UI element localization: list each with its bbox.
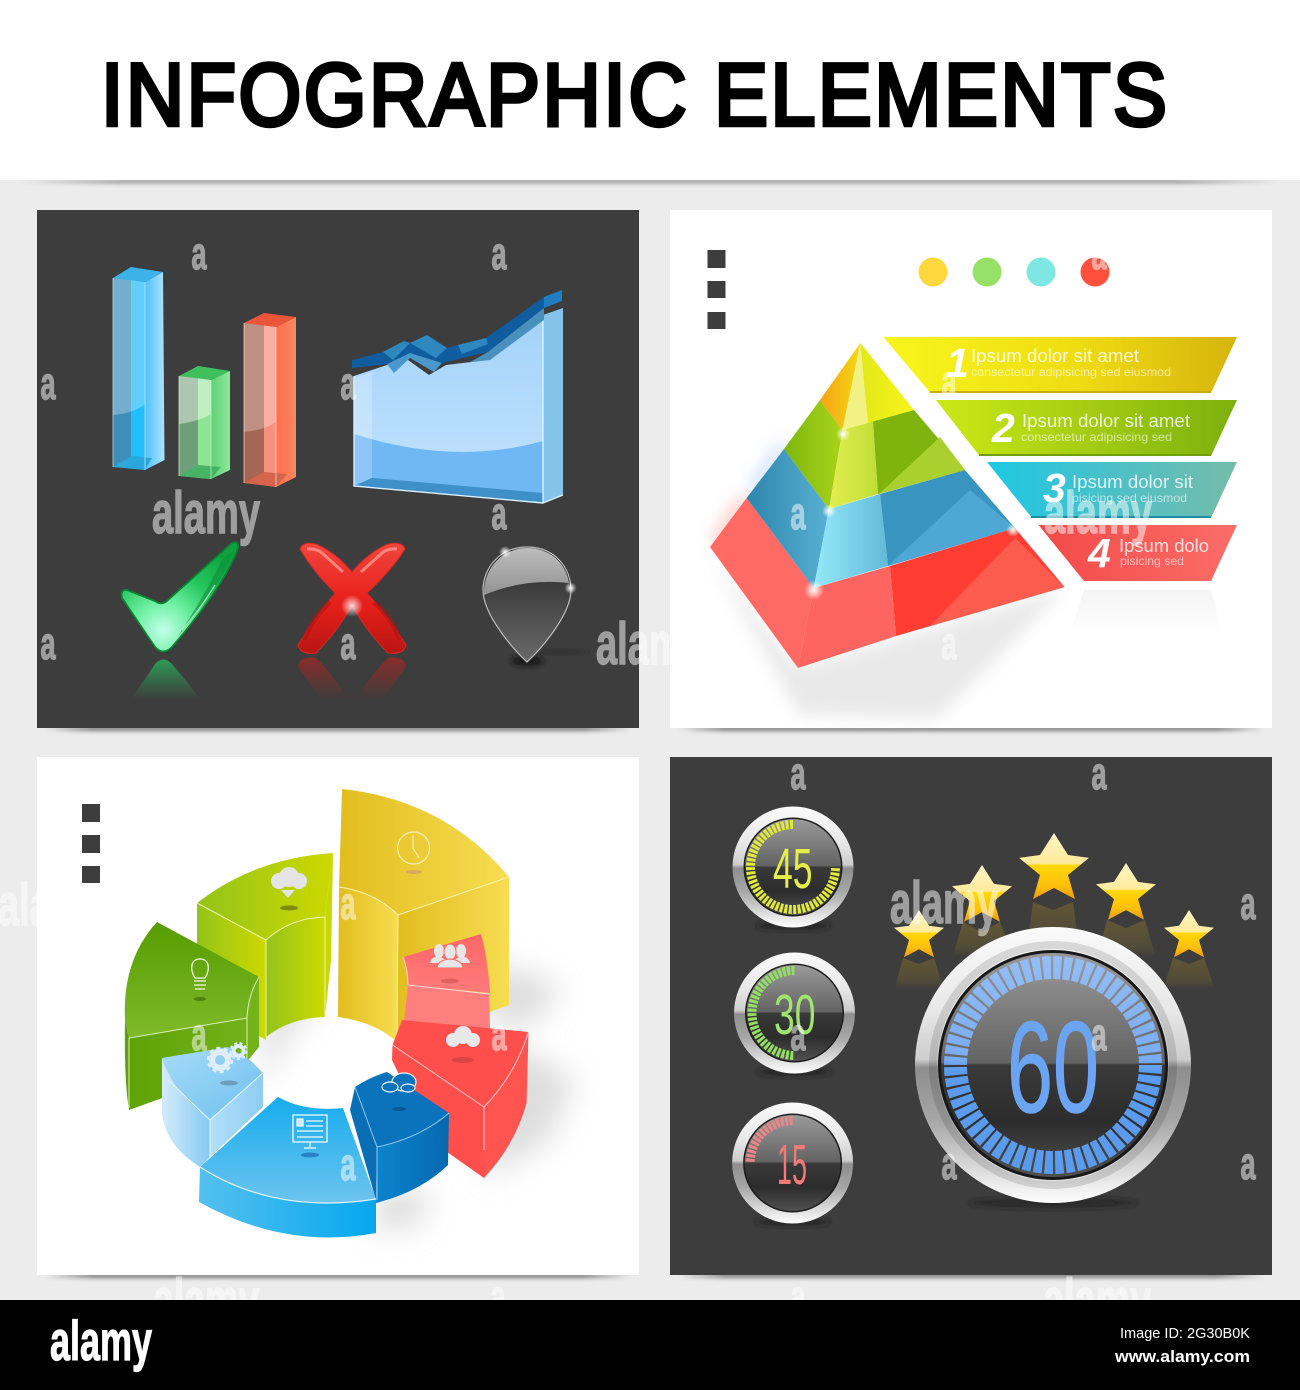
watermark overlay: alamy bbox=[1043, 1267, 1151, 1333]
watermark overlay: a bbox=[942, 618, 957, 669]
band 2: Ipsum dolor sit amet bbox=[1022, 411, 1190, 431]
segment: red cloud bbox=[392, 1020, 528, 1178]
band 3: 3 bbox=[1043, 465, 1066, 511]
rating stars bbox=[894, 833, 1214, 987]
watermark overlay: a bbox=[942, 356, 957, 407]
website: www.alamy.com bbox=[1114, 1347, 1250, 1366]
segment: light blue gears bbox=[162, 1043, 263, 1167]
watermark overlay: a bbox=[1092, 748, 1107, 799]
watermark overlay: alamy bbox=[152, 480, 260, 546]
band 1 bbox=[883, 337, 1237, 393]
segment: mid blue monitor bbox=[199, 1097, 376, 1237]
icon: monitor with document bbox=[293, 1115, 327, 1148]
watermark overlay: a bbox=[790, 748, 806, 799]
watermark overlay: a bbox=[192, 228, 207, 279]
segment: dark blue chat bbox=[350, 1072, 449, 1203]
watermark overlay: a bbox=[942, 1138, 957, 1189]
icon: red cross mark bbox=[298, 543, 406, 768]
watermark overlay: a bbox=[1240, 1138, 1256, 1189]
segment: lime cloud download bbox=[197, 853, 333, 1040]
donut shadows bbox=[262, 960, 575, 1233]
area chart: glass panel with ribbon bbox=[352, 290, 563, 503]
pyramid bbox=[710, 343, 1065, 668]
icon: chat bubbles bbox=[382, 1073, 416, 1092]
gauge: 60 large: 60 bbox=[1007, 994, 1099, 1140]
tier 3 blue bbox=[747, 449, 1015, 588]
pyramid shadow bbox=[710, 555, 1064, 718]
blue bar bbox=[113, 267, 164, 470]
watermark overlay bbox=[0, 228, 1256, 1333]
footer bar bbox=[0, 1300, 1300, 1390]
panel: glass charts and marks bbox=[37, 210, 639, 769]
image id: Image ID: 2G30B0K bbox=[1120, 1325, 1250, 1342]
menu squares bbox=[708, 250, 726, 329]
watermark overlay: a bbox=[490, 1271, 506, 1322]
band 3: Ipsum dolor sit bbox=[1072, 472, 1193, 492]
icon: cloud download bbox=[271, 867, 307, 898]
watermark overlay: a bbox=[192, 1009, 207, 1060]
gauge: 60 large bbox=[915, 927, 1191, 1208]
star 2 bbox=[952, 865, 1012, 922]
watermark overlay: alamy bbox=[890, 870, 998, 936]
green bar bbox=[179, 366, 230, 479]
segment: pink people bbox=[403, 934, 490, 1030]
watermark overlay: alamy bbox=[596, 611, 704, 677]
watermark overlay: a bbox=[340, 358, 356, 409]
tier 4 red bbox=[710, 498, 1065, 668]
star 5 bbox=[1164, 910, 1214, 957]
watermark overlay: alamy bbox=[0, 872, 106, 938]
icon: clock bbox=[398, 832, 430, 864]
star 4 bbox=[1096, 863, 1156, 920]
icon: people bbox=[430, 944, 470, 968]
band 4: Ipsum dolo bbox=[1119, 536, 1209, 556]
watermark overlay: a bbox=[492, 488, 507, 539]
menu squares bbox=[82, 804, 100, 883]
donut chart bbox=[125, 789, 529, 1237]
panel: timers and rating stars bbox=[670, 757, 1272, 1278]
star reflections bbox=[895, 902, 1214, 987]
band 2: 2 bbox=[991, 405, 1015, 451]
band 3: pisicing sed eiusmod bbox=[1072, 491, 1187, 505]
watermark overlay: alamy bbox=[1044, 480, 1152, 546]
band 3 bbox=[987, 462, 1237, 518]
watermark overlay: a bbox=[340, 618, 356, 669]
watermark overlay: a bbox=[1092, 1009, 1107, 1060]
panel: 3D pyramid bbox=[670, 210, 1272, 731]
band 4: 4 bbox=[1087, 530, 1111, 576]
footer logo: alamy bbox=[50, 1309, 152, 1372]
gauge: 30 bbox=[734, 952, 855, 1076]
band 1: 1 bbox=[946, 340, 969, 386]
gauge: 15: 15 bbox=[777, 1133, 807, 1197]
icon: gears bbox=[208, 1043, 246, 1072]
watermark overlay: a bbox=[492, 228, 507, 279]
red bar bbox=[244, 313, 296, 487]
panel: 3D donut chart bbox=[37, 757, 639, 1278]
watermark overlay: a bbox=[40, 618, 56, 669]
watermark overlay: a bbox=[340, 1139, 356, 1190]
band 2 bbox=[936, 400, 1237, 456]
icon: cloud bbox=[446, 1026, 480, 1047]
watermark overlay: a bbox=[40, 358, 56, 409]
star 1 bbox=[894, 910, 944, 957]
watermark overlay: a bbox=[790, 1009, 806, 1060]
header band bbox=[0, 0, 1300, 183]
legend dots bbox=[918, 258, 1110, 286]
band 2: consectetur adipisicing sed bbox=[1021, 430, 1172, 444]
icon: light bulb bbox=[192, 959, 208, 989]
band 4 bbox=[1039, 525, 1237, 581]
watermark overlay: a bbox=[340, 878, 356, 929]
segment: dark green bulb bbox=[125, 922, 259, 1110]
ribbon line bbox=[352, 290, 562, 368]
gauge: 45: 45 bbox=[773, 837, 812, 901]
watermark overlay: a bbox=[790, 1271, 806, 1322]
segment: yellow clock bbox=[338, 789, 509, 1042]
star 3 bbox=[1019, 833, 1089, 899]
gauge: 30: 30 bbox=[774, 983, 816, 1047]
watermark overlay: a bbox=[492, 1009, 507, 1060]
tier 1 yellow bbox=[820, 343, 914, 430]
band 4: pisicing sed bbox=[1120, 554, 1184, 568]
band 1: Ipsum dolor sit amet bbox=[971, 346, 1139, 366]
band reflection bbox=[1070, 590, 1222, 635]
watermark overlay: a bbox=[1240, 878, 1256, 929]
gauge: 45 bbox=[732, 806, 854, 930]
gauge: 15 bbox=[732, 1102, 853, 1226]
pyramid glow bbox=[715, 445, 784, 542]
watermark overlay: alamy bbox=[153, 1267, 259, 1333]
icon: green check mark bbox=[122, 542, 238, 769]
bar chart: glass bars bbox=[113, 267, 296, 487]
title: INFOGRAPHIC ELEMENTS bbox=[101, 46, 1167, 144]
icon: glass map pin bbox=[483, 546, 588, 666]
watermark overlay: a bbox=[1092, 228, 1107, 279]
watermark overlay: a bbox=[790, 488, 806, 539]
band 1: consectetur adipisicing sed eiusmod bbox=[971, 365, 1171, 379]
tier 2 green bbox=[784, 400, 965, 509]
